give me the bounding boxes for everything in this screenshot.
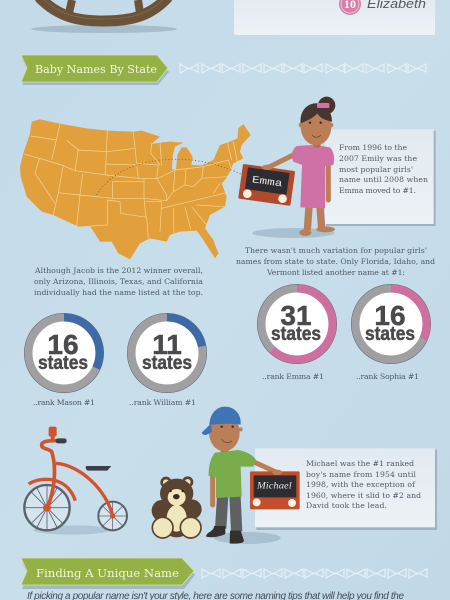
text: Michael: 1998, with the exception of [306, 480, 416, 489]
donut: 31 states Emma: 31 [280, 300, 312, 331]
text: Jacob: only Arizona, Illinois, Texas, and California [34, 277, 203, 286]
text: girls variation: There wasn't much variation for popular girls' [245, 246, 427, 255]
bow tie divider [180, 64, 426, 73]
Emma board [238, 164, 295, 206]
text: Emily to Emma: 2007 Emily was the [339, 154, 417, 163]
text: Emily to Emma: Emma moved to #1. [339, 186, 416, 195]
Emma board: Emma [251, 174, 283, 189]
state borders [24, 124, 237, 238]
donut: 11 states William: states [142, 353, 192, 374]
donut: 16 states Sophia: 16 [374, 300, 406, 331]
text: Michael: David took the lead. [306, 501, 387, 510]
donut: 16 states Mason [24, 313, 104, 393]
text: Emily to Emma [339, 143, 428, 195]
heading: Baby Names By State: Baby Names By State [35, 63, 157, 76]
Michael board: Michael [256, 482, 292, 492]
note card: Michael [255, 448, 437, 530]
text: Michael: boy's name from 1954 until [306, 470, 417, 479]
donut: 16 states Mason: 16 [47, 329, 79, 360]
donut: 11 states William [127, 313, 207, 393]
text: Jacob [34, 266, 203, 297]
tricycle [24, 427, 127, 535]
text: Emily to Emma: From 1996 to the [339, 143, 407, 152]
donut: 31 states Emma: states [271, 324, 321, 345]
text: Michael: Michael was the #1 ranked [306, 459, 414, 468]
label: Sophia: ..rank Sophia #1 [356, 372, 419, 381]
boy with Michael board [202, 407, 437, 544]
bow tie divider [202, 569, 427, 578]
label: Mason: ..rank Mason #1 [33, 398, 95, 407]
text: Jacob: individually had the name listed at the top. [34, 288, 203, 297]
teddy bear [152, 476, 202, 538]
text: girls variation: names from state to state. Only Florida, Idaho, and [236, 257, 435, 266]
girl with Emma board [238, 97, 436, 238]
text: Michael: 1960, where it slid to #2 and [306, 491, 421, 500]
label: William: ..rank William #1 [129, 398, 196, 407]
text: girls variation [236, 246, 435, 277]
label: Emma: ..rank Emma #1 [262, 372, 324, 381]
Michael board [250, 471, 300, 509]
text: Emily to Emma: name until 2008 when [339, 175, 428, 184]
donut: 16 states Sophia [351, 284, 431, 364]
donut: 31 states Emma [257, 284, 337, 364]
note card: Emily to Emma [325, 129, 436, 226]
text: Michael [306, 459, 421, 510]
heading: Baby Names By State [21, 55, 169, 85]
donut: 11 states William: 11 [152, 329, 182, 360]
donut: 16 states Mason: states [38, 353, 88, 374]
name list panel [234, 0, 435, 35]
donut: 16 states Sophia: states [365, 324, 415, 345]
heading: Finding A Unique Name [21, 558, 195, 589]
text: girls variation: Vermont listed another name at #1: [266, 268, 405, 277]
rocking horse base [31, 0, 177, 33]
US map [20, 119, 251, 259]
text: Jacob: Although Jacob is the 2012 winner overall, [34, 266, 203, 275]
text: Emily to Emma: most popular girls' [339, 165, 413, 174]
heading: Finding A Unique Name: Finding A Unique Name [36, 567, 179, 580]
